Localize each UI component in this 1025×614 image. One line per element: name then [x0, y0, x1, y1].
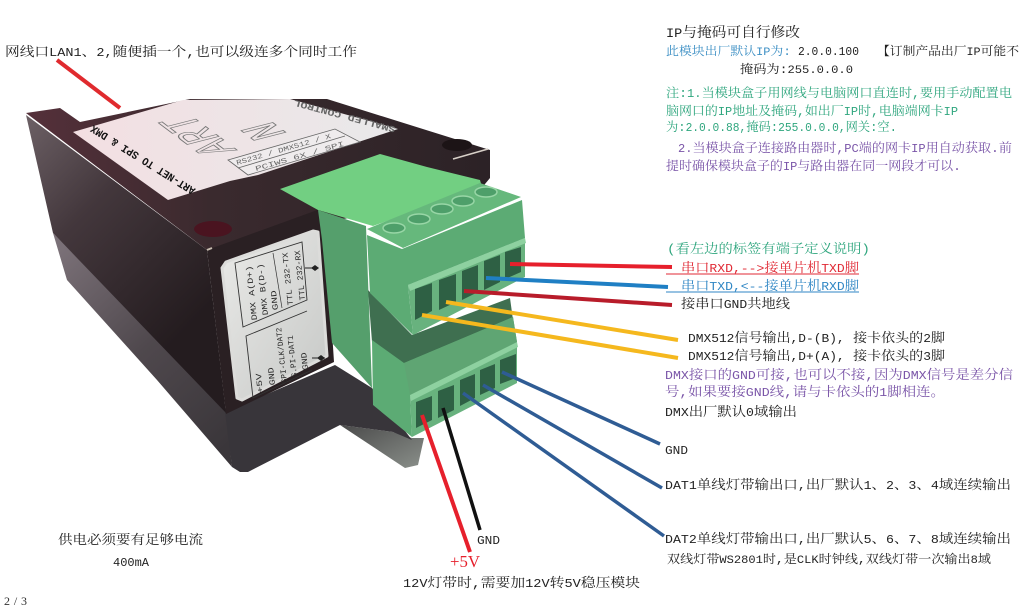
top label title: ART-NET TO SPI & DMX: [89, 121, 198, 196]
top label logo N: N: [232, 117, 303, 144]
photo: green terminal blocks: [280, 154, 526, 437]
note 2: [666, 140, 1012, 174]
IP heading: IP与掩码可自行修改: [666, 24, 800, 42]
wire: DMX D+ yellow: [422, 315, 678, 358]
DMX GND note: 号,如果要接 GND线,请与卡依头的 1脚相连。: [665, 384, 945, 400]
TXD label: 串口TXD,<-- 接单片机 RXD脚: [681, 278, 859, 294]
terminal label text: DMX B(D-): [257, 263, 271, 316]
DAT2 label: DAT2单线灯带输出口 ,出厂默认 5、6、7、8域连续输出: [665, 531, 1011, 547]
output GND label: GND: [665, 444, 688, 458]
wire: LAN pointer: [57, 60, 120, 108]
note 1: 为:2.0.0.88,掩码:255.0.0.0,网关:空.: [666, 119, 897, 135]
page number: 2/3: [4, 594, 27, 608]
current value: 400mA: [113, 556, 150, 570]
wire: TXD blue: [486, 278, 668, 287]
wire: +5V red: [422, 415, 470, 552]
lower terminal block: [372, 317, 518, 437]
box lower front base: [225, 365, 412, 472]
RXD underline: [666, 273, 859, 275]
WS2801 note: 双线灯带 WS2801 时,是 CLK时钟线,双线灯带一次输出 8域: [667, 551, 991, 567]
IP notes block: [666, 24, 1019, 174]
note 2: 2.当模块盒子连接路由器时, PC端的网卡IP用自动获取.前: [678, 140, 1012, 156]
terminal label text: TTL 232-RX: [294, 250, 308, 301]
top label logo: ART: [150, 110, 252, 160]
top label model line: SMALLED CONTROL: [293, 97, 397, 134]
mounting hole near: [194, 221, 232, 237]
custom product note: 【订制产品出厂 IP可能不: [877, 43, 1019, 59]
mounting hole far: [442, 139, 472, 151]
label hint: (看左边的标签有端子定义说明): [667, 241, 870, 257]
terminal label text: GND: [270, 290, 281, 311]
wire slots upper: [415, 247, 521, 320]
note 1: 注:1.当模块盒子用网线与电脑网口直连时,要用手动配置电: [666, 85, 1013, 101]
box upper side face: [26, 115, 226, 413]
DMX GND note: DMX接口的 GND可接,也可以不接,因为 DMX信号是差分信: [665, 367, 1013, 383]
wire slots lower: [416, 354, 516, 428]
top label: [73, 97, 398, 200]
mask line: 掩码为: 255.0.0.0: [740, 61, 853, 77]
power supply note: 供电必须要有足够电流: [58, 532, 203, 548]
upper terminal block: [367, 183, 526, 335]
default IP line: 此模块出厂默认 IP为:: [666, 43, 791, 59]
box end face: [207, 205, 334, 414]
DMX D- label: DMX512 信号输出 ,D-(B), 接卡依头的 2脚: [688, 330, 945, 346]
port table row one: RS232 / DMX512 / X: [236, 133, 333, 168]
terminal label text: GND: [267, 367, 278, 386]
note 2: 提时确保模块盒子的 IP与路由器在同一网段才可以.: [666, 158, 961, 174]
DMX D+ label: DMX512 信号输出 ,D+(A), 接卡依头的 3脚: [688, 348, 945, 364]
top label port table: [228, 129, 360, 175]
wire: DAT1 blue: [483, 385, 662, 488]
serial GND label: 接串口 GND共地线: [681, 296, 790, 312]
box lower side face: [53, 233, 232, 467]
terminal label text: GND: [300, 352, 311, 371]
box top face: [26, 99, 490, 250]
terminal notes block: [665, 241, 1013, 567]
power GND label: GND: [477, 534, 500, 548]
gap between the blocks: [368, 290, 513, 365]
far edge highlight: [453, 149, 488, 159]
terminal label text: DMX A(D+): [245, 265, 260, 321]
terminal label text: S.PI-DAT1: [287, 335, 300, 378]
TXD underline: [666, 291, 859, 293]
terminal label text: [245, 250, 311, 394]
wire: DAT2 blue: [463, 393, 664, 536]
back block top: [280, 154, 482, 226]
terminal label text: TTL 232-TX: [281, 252, 296, 306]
wire: GND dark red: [464, 291, 672, 305]
wire: DMX D- yellow: [446, 302, 678, 340]
ground shadow under terminals: [340, 425, 424, 468]
terminal label text: +5V: [255, 373, 266, 394]
wire: GND blue: [502, 372, 660, 444]
wire: RXD red: [510, 264, 672, 267]
default IP value: 2.0.0.100: [798, 46, 859, 59]
+5V label: +5V: [450, 552, 481, 571]
LAN note: 网线口 LAN1 、2,随便插一个,也可以级连多个同时工作: [5, 44, 357, 60]
photo: module box: [26, 97, 490, 472]
corner highlight: [207, 248, 212, 250]
screw holes upper: [383, 187, 497, 233]
note 1: [666, 85, 1013, 135]
note 1: 脑网口的IP地址及掩码,如出厂 IP时,电脑端网卡 IP: [666, 103, 958, 119]
RXD label: 串口RXD,--> 接单片机 TXD脚: [681, 260, 859, 276]
DAT1 label: DAT1单线灯带输出口 ,出厂默认 1、2、3、4域连续输出: [665, 477, 1011, 493]
end face terminal label: [222, 231, 327, 400]
DMX universe note: DMX出厂默认 0域输出: [665, 404, 797, 420]
back block side: [318, 210, 372, 388]
12V note: 12V灯带时,需要加 12V转5V稳压模块: [403, 575, 640, 591]
port table row two: PCIWS 6X / SPI: [255, 141, 345, 174]
DMX GND note: [665, 367, 1013, 400]
terminal label text: SPI-CLK/DAT2: [275, 327, 290, 384]
wire: GND black: [443, 408, 480, 530]
